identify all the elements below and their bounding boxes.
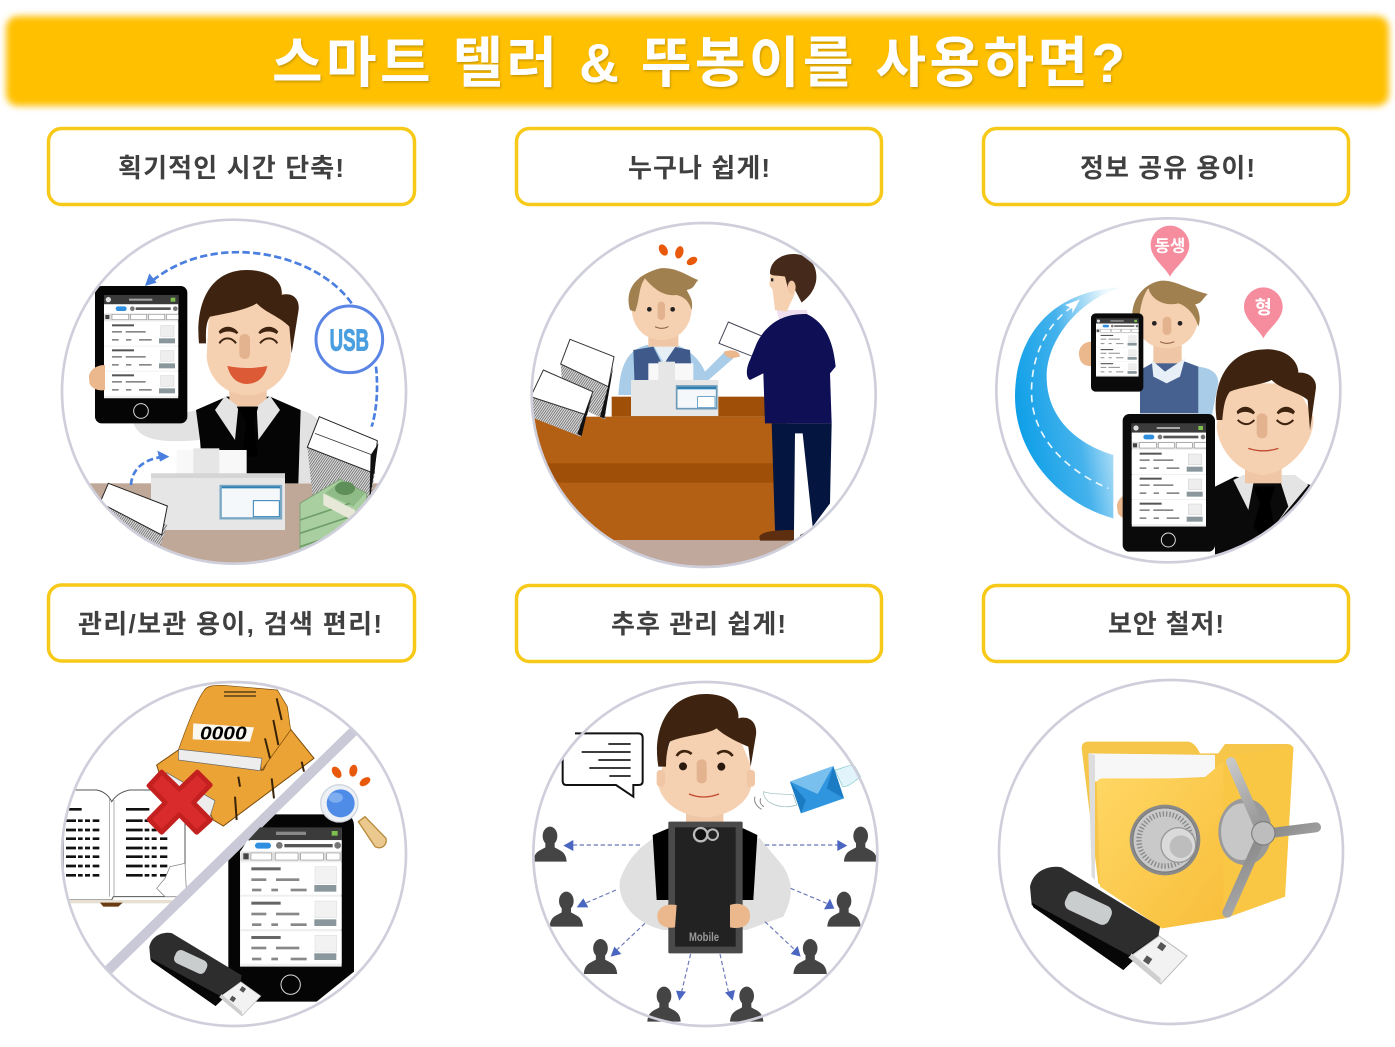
flying envelope [755, 766, 861, 813]
USB drive [1030, 867, 1187, 984]
illustration 3: brothers sharing with tablets: 동생 [1155, 237, 1185, 256]
dashed arrows to recipients [563, 840, 847, 1001]
yellow folder with safe lock [1082, 742, 1316, 928]
illustration 6: security folder with dial and USB [999, 680, 1343, 1024]
people icons [533, 827, 877, 1022]
illustration 2: teller serving customer at counter [520, 223, 887, 573]
label box: easy information sharing [984, 128, 1348, 204]
title banner [6, 16, 1389, 106]
tablet rear with Mobile text [668, 822, 743, 953]
label box: time saving: 획기적인 시간 단축! [118, 153, 344, 183]
label box: easy follow-up: 추후 관리 쉽게! [611, 609, 786, 639]
label box: easy information sharing: 정보 공유 용이! [1080, 153, 1255, 183]
label box: easy for anyone [516, 128, 882, 204]
illustration 1: banker with tablet and USB [50, 220, 417, 577]
label box: strict security [984, 586, 1348, 662]
red cross mark [149, 772, 210, 832]
stacked orange ledgers: 0000 [200, 722, 247, 743]
speech bubble [563, 733, 643, 797]
label box: time saving [48, 128, 414, 204]
illustration 3: brothers sharing with tablets [996, 218, 1352, 577]
illustration 5: sharing by message with many people [532, 682, 877, 1026]
label box: easy for anyone: 누구나 쉽게! [628, 153, 770, 183]
illustration 4: paper ledgers replaced by mobile search and USB [50, 682, 406, 1026]
label box: management and search: 관리/보관 용이, 검색 편리! [78, 609, 382, 639]
illustration 3: brothers sharing with tablets: 형 [1255, 297, 1272, 318]
phone with records [228, 814, 354, 1002]
magnifying glass [321, 764, 386, 848]
label box: easy follow-up [516, 586, 882, 662]
stacked orange ledgers [157, 685, 314, 826]
tablet rear with Mobile text: Mobile [689, 930, 719, 944]
illustration 1: banker with tablet and USB: USB [330, 324, 369, 358]
label box: management and search [48, 585, 414, 661]
open paper ledger [50, 790, 187, 907]
title banner: 스마트 텔러 & 뚜봉이를 사용하면? [272, 32, 1125, 94]
USB drive [149, 933, 261, 1016]
label box: strict security: 보안 철저! [1108, 609, 1224, 639]
